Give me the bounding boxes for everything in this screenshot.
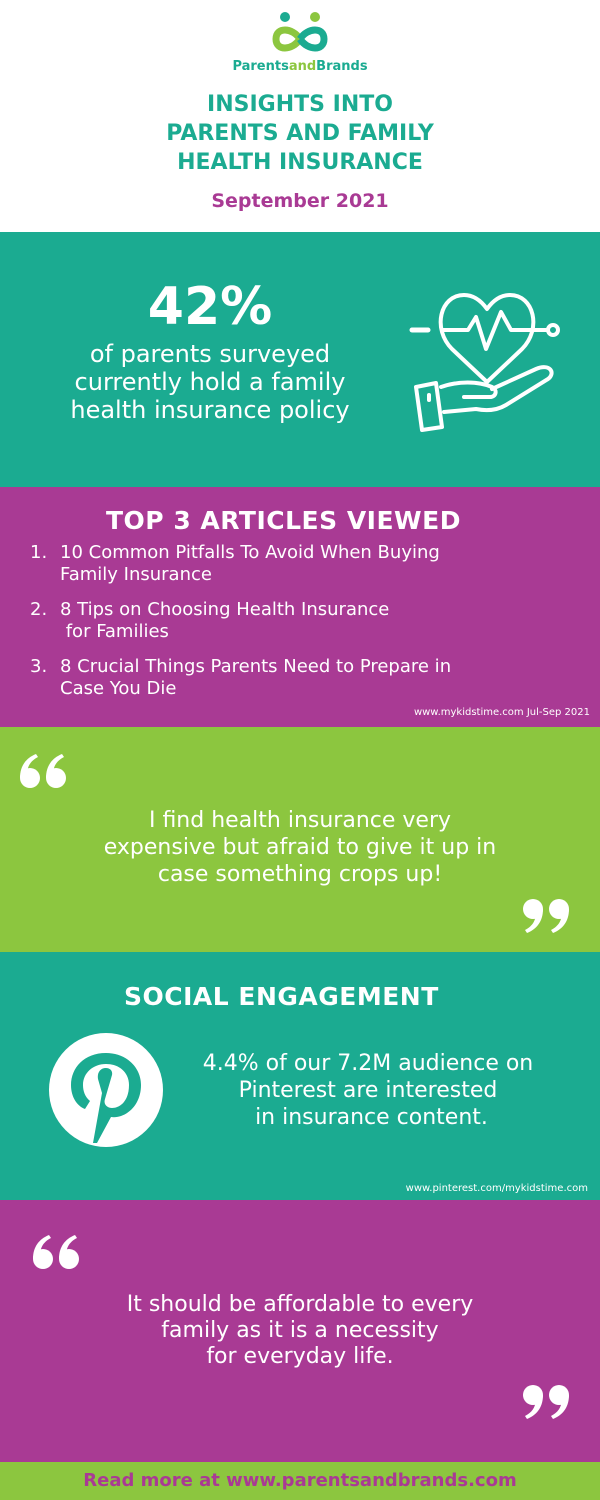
icon: heart in hand <box>410 293 560 432</box>
quote text <box>104 808 496 887</box>
quote text: It should be affordable to every <box>127 1292 473 1317</box>
stat text: health insurance policy <box>70 396 350 424</box>
title: HEALTH INSURANCE <box>177 150 423 175</box>
article list: 10 Common Pitfalls To Avoid When Buying <box>60 542 440 563</box>
stat number: 42% <box>148 277 272 337</box>
icon: pinterest <box>49 1033 163 1147</box>
title <box>166 92 434 175</box>
quote text <box>127 1292 473 1369</box>
heading: TOP 3 ARTICLES VIEWED <box>106 506 461 535</box>
panel: 42% stat <box>0 232 600 487</box>
panel: quote 2 <box>0 1200 600 1462</box>
stat text: Pinterest are interested <box>239 1078 497 1103</box>
footer <box>0 1462 600 1500</box>
date: September 2021 <box>211 190 389 212</box>
title: PARENTS AND FAMILY <box>166 121 434 146</box>
article list: 3. <box>30 656 47 677</box>
article list: 8 Crucial Things Parents Need to Prepare in <box>60 656 451 677</box>
panel: quote 1 <box>0 727 600 952</box>
stat text: of parents surveyed <box>90 340 330 368</box>
panel: social engagement <box>0 952 600 1200</box>
article list: for Families <box>66 621 169 642</box>
heading: SOCIAL ENGAGEMENT <box>124 982 439 1011</box>
logo: ParentsandBrands <box>232 59 368 74</box>
icon: close quote <box>523 899 569 933</box>
icon: open quote <box>33 1235 79 1269</box>
source: www.mykidstime.com Jul-Sep 2021 <box>414 707 590 718</box>
footer link text: Read more at www.parentsandbrands.com <box>83 1470 517 1491</box>
source: www.pinterest.com/mykidstime.com <box>406 1183 588 1194</box>
stat text: currently hold a family <box>75 368 345 396</box>
quote text: family as it is a necessity <box>161 1318 439 1343</box>
article list: Family Insurance <box>60 564 212 585</box>
icon: close quote <box>523 1385 569 1419</box>
article list: 1. <box>30 542 47 563</box>
stat text: in insurance content. <box>255 1105 488 1130</box>
quote text: for everyday life. <box>206 1344 394 1369</box>
stat text: 4.4% of our 7.2M audience on <box>203 1051 533 1076</box>
stat text <box>203 1051 533 1130</box>
quote text: expensive but afraid to give it up in <box>104 835 496 860</box>
quote text: case something crops up! <box>158 862 442 887</box>
logo <box>232 12 368 74</box>
article list: 8 Tips on Choosing Health Insurance <box>60 599 389 620</box>
title: INSIGHTS INTO <box>207 92 393 117</box>
article list: Case You Die <box>60 678 176 699</box>
panel: top 3 articles <box>0 487 600 727</box>
header <box>0 0 600 232</box>
article list: 2. <box>30 599 47 620</box>
icon: open quote <box>20 754 66 788</box>
quote text: I find health insurance very <box>149 808 451 833</box>
article list <box>30 542 451 699</box>
stat text <box>70 340 350 424</box>
